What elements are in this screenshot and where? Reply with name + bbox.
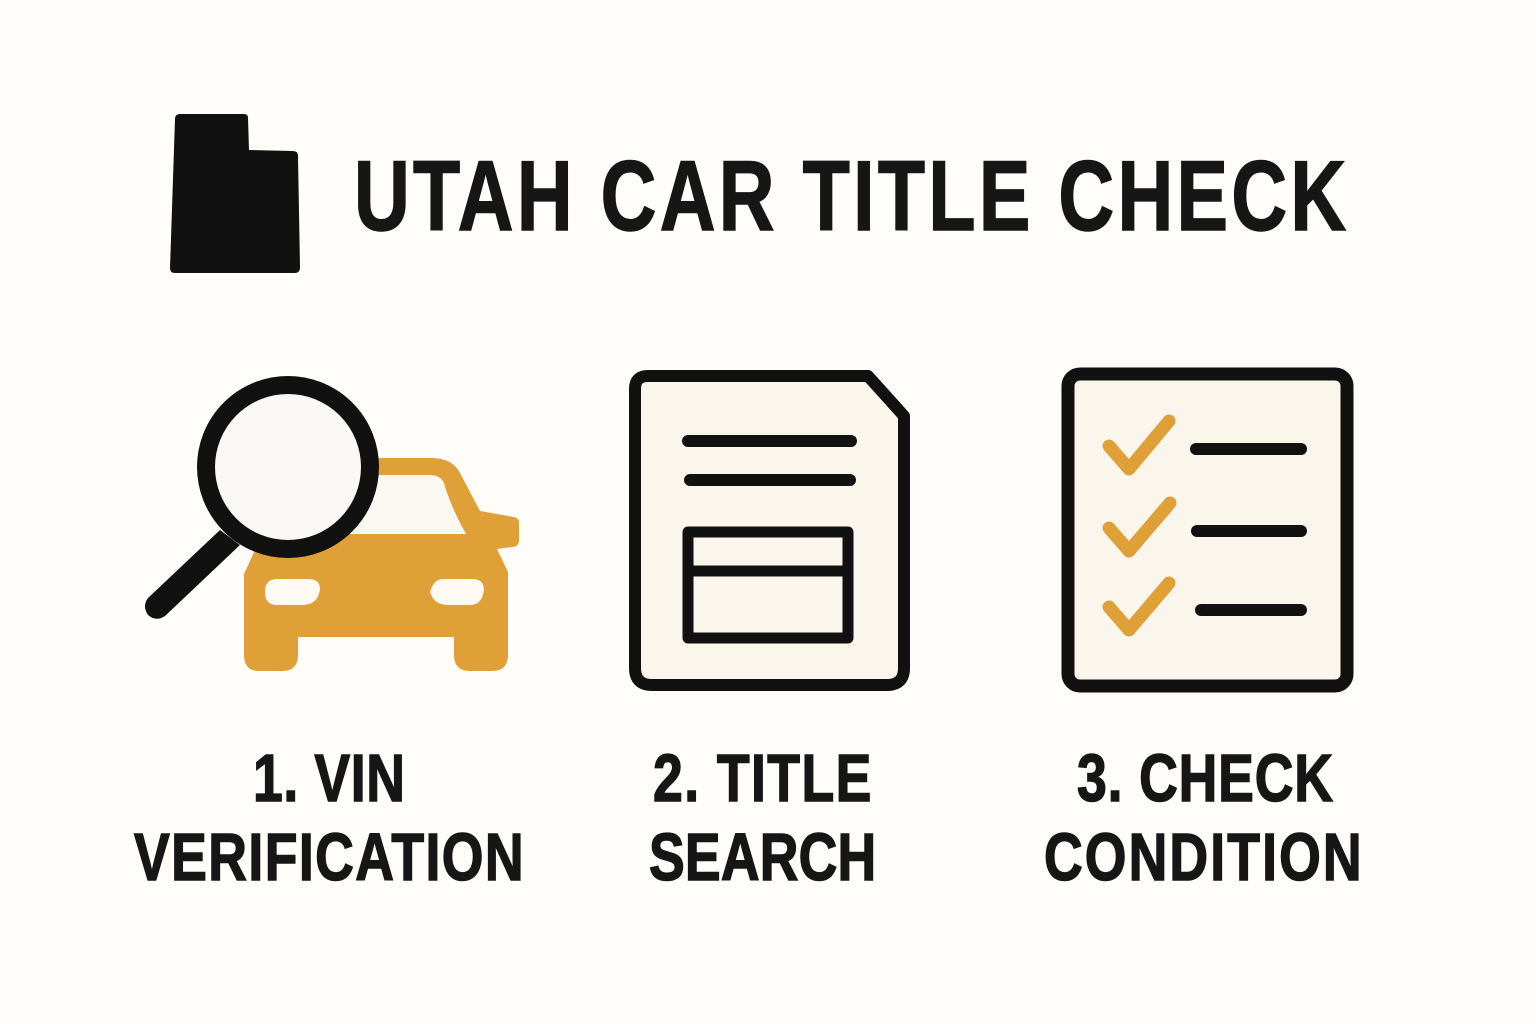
title: UTAH CAR TITLE CHECK xyxy=(354,141,1346,251)
label: step 2 xyxy=(649,740,876,894)
label: step 3 xyxy=(1044,740,1362,894)
label: step 3: CONDITION xyxy=(1044,819,1362,894)
icon: checklist xyxy=(1068,374,1347,686)
label: step 1: 1. VIN xyxy=(253,740,405,815)
label: step 1 xyxy=(134,740,524,894)
icon: title document xyxy=(635,376,904,685)
label: step 2: 2. TITLE xyxy=(653,740,871,815)
icon: magnifying glass xyxy=(145,385,370,619)
panel: VIN verification xyxy=(134,385,524,894)
panel: check condition xyxy=(1044,374,1362,894)
label: step 2: SEARCH xyxy=(649,819,876,894)
label: step 3: 3. CHECK xyxy=(1077,740,1333,815)
icon: orange car xyxy=(244,458,519,671)
panel: title search xyxy=(635,376,904,894)
icon: Utah state silhouette xyxy=(170,114,300,273)
label: step 1: VERIFICATION xyxy=(134,819,524,894)
